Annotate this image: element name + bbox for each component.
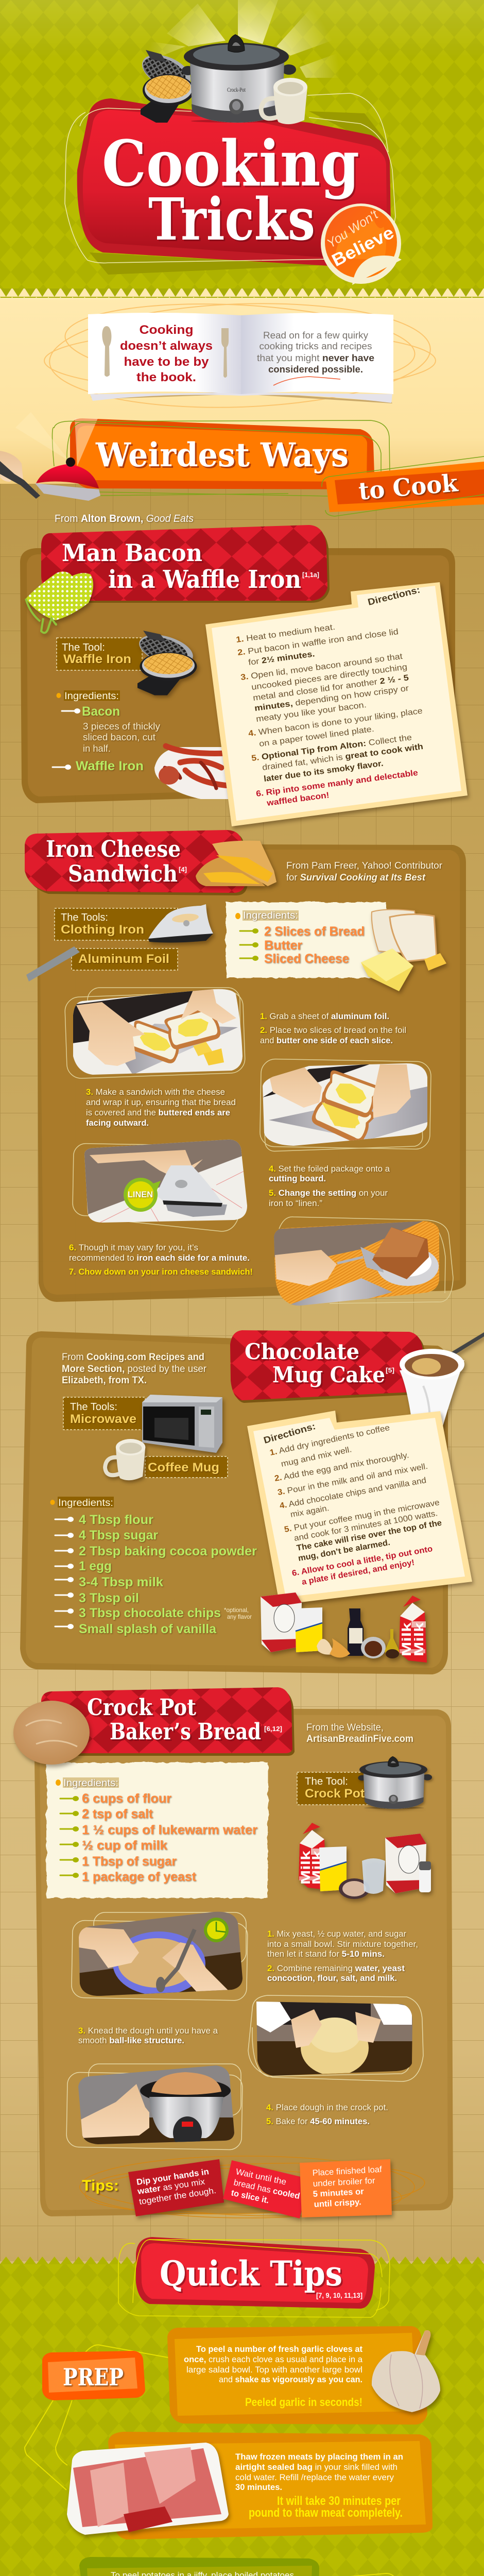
decorative ellipses xyxy=(44,296,436,414)
icon: crock pot xyxy=(358,1756,432,1809)
direction steps: on a paper towel lined plate. xyxy=(258,725,375,749)
title: Cooking Tricks: Cooking xyxy=(102,126,359,200)
tip card 1: together the dough. xyxy=(139,2186,217,2207)
tip card 2 xyxy=(223,2160,309,2218)
tip text: cold water. Refill /replace the water every xyxy=(235,2473,394,2482)
credit: Artisan Bread: From the Website, xyxy=(306,1722,384,1733)
ingredients paper: 1 package of yeast xyxy=(82,1870,197,1884)
tool box: clothing iron: The Tools: xyxy=(61,912,108,923)
tip text: Peeled garlic in seconds! xyxy=(245,2396,362,2409)
title: Cooking Tricks: Tricks xyxy=(148,186,315,253)
background: green diamond quick tips section xyxy=(0,2264,484,2576)
photo step 3: ironing xyxy=(73,1136,250,1231)
icon group: cake ingredients xyxy=(261,1592,427,1663)
ingredients list: 4 Tbsp flour xyxy=(79,1513,153,1527)
sticker: You Won't Believe: You Won't xyxy=(324,207,381,251)
sticker: You Won't Believe: Believe xyxy=(329,223,397,270)
text: step 3: smooth ball-like structure. xyxy=(78,2036,184,2045)
ingredients paper: Ingredients: xyxy=(243,910,298,921)
icon group: bread ingredients xyxy=(299,1823,431,1899)
text: read on: considered possible. xyxy=(268,364,363,375)
ingredients list: 1 egg xyxy=(79,1559,112,1573)
direction steps: The cake will rise over the top of the xyxy=(296,1519,442,1553)
title text: Baker’s Bread xyxy=(110,1719,261,1745)
direction steps: mug, don’t be alarmed. xyxy=(298,1538,391,1563)
icon: garlic xyxy=(372,2330,440,2412)
icon: foil roll xyxy=(26,946,80,981)
icon: spoon xyxy=(102,326,111,377)
icon group: bread ingredients: Milk xyxy=(310,1851,324,1885)
panel: Man Bacon in a Waffle Iron xyxy=(20,525,468,826)
title text: Chocolate xyxy=(245,1339,359,1364)
credit: Cooking.com xyxy=(62,1352,207,1386)
icon: clothing iron xyxy=(148,904,213,943)
background: wooden table grid section xyxy=(0,484,484,2261)
hero: title banner with appliances xyxy=(65,0,402,285)
ingredients list: 3-4 Tbsp milk xyxy=(79,1575,163,1589)
text: step 1 and 2 xyxy=(260,1011,406,1045)
tips: heading and ellipses xyxy=(80,2156,425,2221)
tip text: large salad bowl. Top with another large bowl xyxy=(186,2365,362,2375)
title text: Sandwich xyxy=(68,861,178,887)
icon: bread, butter and cheese xyxy=(361,909,446,991)
ingredients paper: 6 cups of flour xyxy=(82,1791,171,1806)
icon group: bread ingredients: Milk xyxy=(299,1851,313,1885)
panel: Crock Pot Baker's Bread xyxy=(13,1687,453,2221)
text: step 1 and 2: 1. Mix yeast, ½ cup water, and sugar xyxy=(267,1929,406,1939)
photo step 4: finished toast xyxy=(273,1217,453,1309)
direction steps: 2. Put bacon in waffle iron and close lid xyxy=(237,628,399,657)
ingredients paper: 1 Tbsp of sugar xyxy=(82,1854,177,1869)
title: Cooking Tricks xyxy=(102,126,359,253)
title text: in a Waffle Iron xyxy=(108,565,301,594)
tip card 3: Place finished loaf xyxy=(312,2165,382,2178)
direction steps: drained fat, which is great to cook with xyxy=(262,742,424,772)
ingredients list: 2 Tbsp baking cocoa powder xyxy=(79,1544,257,1558)
text: step 1 and 2: then let it stand for 5-10 mins. xyxy=(267,1949,385,1959)
tool box: waffle iron: Waffle Iron xyxy=(63,652,131,666)
tip card 1: Dip your hands in xyxy=(136,2167,210,2187)
tool box: microwave: The Tools: xyxy=(70,1401,117,1413)
direction steps: 2. Add the egg and mix thoroughly. xyxy=(274,1451,410,1483)
direction steps: 3. Open lid, move bacon around so that xyxy=(240,652,403,682)
tip card 3 xyxy=(300,2159,392,2217)
credit: Pam Freer: for Survival Cooking at Its Best xyxy=(286,872,426,883)
text: step 3: is covered and the buttered ends are xyxy=(86,1108,230,1117)
heading: Quick Tips: Quick Tips xyxy=(160,2253,342,2294)
callout: LINEN xyxy=(124,1178,161,1212)
title banner xyxy=(25,830,248,895)
ingredients paper: Ingredients: xyxy=(63,1778,118,1789)
ingredients paper xyxy=(46,1762,268,1898)
heading: Quick Tips xyxy=(118,2237,390,2317)
text: step 4 and 5: 4. Place dough in the crock pot. xyxy=(266,2103,388,2112)
text: step 3: and wrap it up, ensuring that the bread xyxy=(86,1097,236,1107)
tip text xyxy=(184,2345,363,2409)
tip card 1: water as you mix xyxy=(136,2177,206,2196)
direction steps: 6. Rip into some manly and delectable xyxy=(255,769,419,799)
direction steps: mug and mix well. xyxy=(280,1445,353,1469)
tip text: pound to thaw meat completely. xyxy=(249,2506,403,2520)
icon: crock pot xyxy=(182,35,296,123)
icon: fork xyxy=(221,328,229,378)
tip text: once, crush each clove as usual and place in a xyxy=(184,2355,363,2364)
text: cooking doesn't always: have to be by xyxy=(124,355,209,369)
ingredient: bacon xyxy=(62,704,160,754)
title banner xyxy=(41,1687,295,1756)
banner: orange xyxy=(70,418,375,489)
photo step 3: bread in crock pot xyxy=(66,2063,243,2150)
panel: Chocolate Mug Cake xyxy=(20,1330,484,1674)
text: read on: Read on for a few quirky xyxy=(263,330,368,341)
icon: grilled cheese sandwich xyxy=(196,841,276,886)
credit: Cooking.com: More Section, posted by the user xyxy=(62,1364,207,1375)
title text: Iron Cheese xyxy=(46,836,181,862)
photo step 1: mixing bowl xyxy=(72,1909,248,2001)
connectors: COOK xyxy=(320,2573,422,2576)
title text xyxy=(87,1694,261,1745)
text: step 1 and 2 xyxy=(267,1929,418,1983)
tip text: and shake as vigorously as you can. xyxy=(219,2375,362,2384)
ingredients paper: Sliced Cheese xyxy=(264,952,349,966)
direction steps: 5. Optional Tip from Alton: Collect the xyxy=(251,733,412,763)
title text: Crock Pot xyxy=(87,1694,197,1721)
tip text: airtight sealed bag in your sink filled with xyxy=(235,2463,397,2472)
citation: [1,1a] xyxy=(302,571,319,579)
directions note: Directions: xyxy=(263,1421,317,1446)
icon: clock xyxy=(204,1918,229,1942)
tip card 1 xyxy=(128,2159,224,2216)
text: step 3: 3. Make a sandwich with the cheese xyxy=(86,1087,225,1097)
panel: Iron Cheese Sandwich xyxy=(25,830,466,1309)
title banner xyxy=(41,525,330,603)
text: step 6 and 7 xyxy=(69,1243,253,1277)
banner: to Cook: to Cook xyxy=(357,469,460,506)
tips: heading and ellipses: Tips: xyxy=(82,2177,119,2194)
ingredient: waffle iron: Waffle Iron xyxy=(76,759,144,773)
title text: Mug Cake xyxy=(272,1362,385,1387)
directions note: Directions: xyxy=(367,584,421,607)
tip card 3: under broiler for xyxy=(313,2176,376,2189)
directions note xyxy=(247,1411,472,1605)
icon: meat tray xyxy=(67,2443,229,2535)
tool box: coffee mug: Coffee Mug xyxy=(148,1461,219,1475)
background: cream section xyxy=(0,289,484,487)
credit: Pam Freer: From Pam Freer, Yahoo! Contributor xyxy=(286,860,442,871)
tip card 3: 5 minutes or xyxy=(313,2187,365,2199)
icon: waffle iron xyxy=(137,48,196,123)
tool box: aluminum foil xyxy=(72,948,178,970)
direction steps: a plate if desired, and enjoy! xyxy=(301,1558,415,1587)
ingredient: bacon: Bacon xyxy=(82,704,120,719)
text: step 6 and 7: 6. Though it may vary for you, it’s xyxy=(69,1243,198,1252)
outlines xyxy=(53,420,390,496)
text: step 4 and 5 xyxy=(266,2103,388,2126)
text: read on: cooking tricks and recipes xyxy=(260,341,372,351)
ingredients list: Small splash of vanilla xyxy=(79,1622,217,1636)
tool box: clothing iron: Clothing Iron xyxy=(61,923,144,937)
text: step 1 and 2: 2. Combine remaining water, yeast xyxy=(267,1963,405,1973)
sign: PREP: PREP xyxy=(63,2363,124,2391)
text: cooking doesn't always: doesn’t always xyxy=(120,339,213,353)
ingredients paper: 1 ½ cups of lukewarm water xyxy=(82,1823,257,1837)
tip card 3: until crispy. xyxy=(314,2197,361,2209)
direction steps: waffled bacon! xyxy=(266,791,330,808)
text: cooking doesn't always: Cooking xyxy=(139,323,194,337)
photo step 2: kneading dough xyxy=(248,1995,423,2081)
text: step 3 xyxy=(86,1087,236,1128)
citation: [6,12] xyxy=(264,1725,282,1733)
light rays xyxy=(130,0,368,78)
banner: to Cook xyxy=(322,456,484,516)
tip card 2: Wait until the xyxy=(235,2167,287,2187)
direction steps: later due to its smoky flavor. xyxy=(263,759,384,784)
ingredients list: 3 Tbsp chocolate chips xyxy=(79,1606,221,1620)
direction steps: minutes, depending on how crispy or xyxy=(254,684,410,713)
text: step 1 and 2: and butter one side of each slice. xyxy=(260,1036,393,1045)
tool box: waffle iron: The Tool: xyxy=(62,642,105,653)
callout: LINEN: LINEN xyxy=(128,1190,153,1199)
title banner xyxy=(230,1330,425,1403)
ingredients paper xyxy=(226,902,386,978)
direction steps: meaty you like your bacon. xyxy=(255,701,367,724)
tip box: potatoes xyxy=(65,2557,319,2576)
ingredient: bacon: 3 pieces of thickly xyxy=(83,721,160,732)
ingredients paper: 2 tsp of salt xyxy=(82,1807,153,1821)
icon group: cake ingredients: Milk xyxy=(412,1622,426,1656)
text: read on xyxy=(257,330,374,375)
banner shadow shapes xyxy=(90,111,386,275)
tip box: thaw meat xyxy=(67,2432,433,2539)
zigzag edge lower xyxy=(0,2257,484,2264)
background: green diamond top section xyxy=(0,0,484,292)
text: step 6 and 7: recommended to iron each side for a minute. xyxy=(69,1253,250,1263)
icon: mug cake xyxy=(400,1332,484,1428)
text: step 3: 3. Knead the dough until you have a xyxy=(78,2026,218,2036)
direction steps: 1. Add dry ingredients to coffee xyxy=(269,1423,391,1458)
sign: PREP xyxy=(42,2351,145,2400)
text: step 3 xyxy=(78,2026,218,2045)
tip card 2: bread has cooled xyxy=(233,2178,301,2201)
text: step 1 and 2: 1. Grab a sheet of aluminum foil. xyxy=(260,1011,389,1021)
icon: microwave xyxy=(142,1395,222,1453)
direction steps: 1. Heat to medium heat. xyxy=(235,623,336,645)
tool box: microwave: Microwave xyxy=(70,1412,136,1426)
text: step 1 and 2: 2. Place two slices of bread on the foil xyxy=(260,1025,406,1035)
ingredients list: any flavor xyxy=(227,1613,252,1620)
text: step 4 and 5: cutting board. xyxy=(269,1174,326,1183)
title text: Man Bacon xyxy=(62,539,202,567)
text: Weirdest Ways: Weirdest Ways xyxy=(95,436,349,474)
sticker: You Won't Believe xyxy=(321,204,402,285)
text: read on: that you might never have xyxy=(257,353,374,363)
icon: waffle iron xyxy=(133,629,199,695)
citation: [5] xyxy=(386,1366,394,1374)
banner outlines xyxy=(65,93,395,263)
tool box: aluminum foil: Aluminum Foil xyxy=(78,952,169,966)
tool box: microwave xyxy=(63,1397,145,1430)
ingredients label: Ingredients: xyxy=(64,691,119,702)
ingredients paper: ½ cup of milk xyxy=(82,1838,167,1853)
text: step 4 and 5: iron to “linen.” xyxy=(269,1198,322,1208)
connectors: PREP xyxy=(25,2345,168,2490)
tip text xyxy=(235,2452,403,2520)
credit: Cooking.com: Elizabeth, from TX. xyxy=(62,1375,147,1386)
tool box: crock pot: The Tool: xyxy=(305,1776,348,1787)
tool box: crock pot xyxy=(297,1756,432,1809)
direction steps: 4. Add chocolate chips and vanilla and xyxy=(279,1476,427,1511)
tip box: garlic xyxy=(167,2326,440,2425)
photo step 2: assembling sandwich xyxy=(260,1059,431,1151)
ingredients paper: 2 Slices of Bread xyxy=(264,924,365,939)
citation: [7, 9, 10, 11,13] xyxy=(316,2291,362,2299)
directions note xyxy=(205,582,468,826)
title text xyxy=(245,1339,385,1387)
photo step 1: buttering bread xyxy=(64,987,246,1079)
ingredients list: 3 Tbsp oil xyxy=(79,1591,139,1605)
text: step 4 and 5 xyxy=(269,1164,390,1208)
direction steps: uncooked pieces are directly touching xyxy=(251,663,408,692)
tip card 2: to slice it. xyxy=(230,2188,270,2206)
credit: Alton Brown: From Alton Brown, Good Eats xyxy=(55,513,194,524)
direction steps: mix again. xyxy=(290,1504,330,1519)
credit: Cooking.com: From Cooking.com Recipes and xyxy=(62,1352,204,1363)
icon: crock pot: Crock-Pot xyxy=(227,86,246,93)
ingredients list: Ingredients: xyxy=(58,1498,113,1509)
tip text: To peel a number of fresh garlic cloves at xyxy=(196,2345,362,2354)
text: step 3: facing outward. xyxy=(86,1118,149,1128)
text: step 1 and 2: concoction, flour, salt, and milk. xyxy=(267,1973,397,1983)
tool box: crock pot: Crock Pot xyxy=(305,1787,365,1801)
title text xyxy=(62,539,301,594)
text: cooking doesn't always: the book. xyxy=(136,370,196,384)
heading: Weirdest Ways to Cook xyxy=(0,412,484,516)
text: step 4 and 5: 4. Set the foiled package onto a xyxy=(269,1164,390,1174)
text: step 4 and 5: 5. Bake for 45-60 minutes. xyxy=(266,2116,370,2126)
direction steps: 4. When bacon is done to your liking, place xyxy=(248,707,423,738)
icon: coffee mug xyxy=(105,1439,145,1480)
tip text: 30 minutes. xyxy=(235,2483,282,2492)
direction steps: for 2½ minutes. xyxy=(248,650,315,667)
tip text: It will take 30 minutes per xyxy=(277,2494,401,2508)
direction steps xyxy=(269,1423,442,1587)
direction steps: metal and close lid for another 2 ½ - 5 xyxy=(252,673,409,703)
intro: open book xyxy=(44,296,436,414)
direction steps: 3. Pour in the milk and oil and mix well. xyxy=(277,1462,428,1497)
direction steps xyxy=(235,623,424,808)
zigzag edge top xyxy=(0,289,484,298)
title text xyxy=(46,836,181,887)
credit: Artisan Bread xyxy=(306,1722,413,1744)
tool box: clothing iron xyxy=(55,908,178,940)
ingredient: bacon: sliced bacon, cut xyxy=(83,732,155,742)
icon: oven mitt xyxy=(26,572,93,633)
text: step 6 and 7: 7. Chow down on your iron cheese sandwich! xyxy=(69,1267,253,1277)
red banner xyxy=(77,98,391,266)
ingredients paper: Butter xyxy=(264,938,302,953)
text: step 1 and 2: into a small bowl. Stir mixture together, xyxy=(267,1939,418,1949)
credit: Pam Freer xyxy=(286,860,442,883)
text: step 4 and 5: 5. Change the setting on your xyxy=(269,1188,388,1198)
ingredients list xyxy=(50,1497,257,1636)
icon: bacon plate xyxy=(154,746,230,799)
credit: Artisan Bread: ArtisanBreadinFive.com xyxy=(306,1734,413,1744)
icon: hand lifting dome xyxy=(0,412,100,501)
citation: [4] xyxy=(179,866,187,873)
icon: coffee mug xyxy=(261,78,307,124)
ingredient: bacon: in half. xyxy=(83,743,111,754)
tip text: Thaw frozen meats by placing them in an xyxy=(235,2452,403,2462)
tool box: coffee mug xyxy=(145,1456,228,1478)
ingredients list: 4 Tbsp sugar xyxy=(79,1528,158,1543)
direction steps: and cook for 3 minutes at 1000 watts. xyxy=(293,1509,438,1543)
icon group: cake ingredients: Milk xyxy=(400,1622,414,1656)
text: cooking doesn't always xyxy=(120,323,213,384)
ingredients list: *optional, xyxy=(224,1606,249,1614)
outlines xyxy=(118,2240,390,2317)
direction steps: 5. Put your coffee mug in the microwave xyxy=(284,1498,440,1534)
direction steps: 6. Allow to cool a little, tip out onto xyxy=(291,1545,434,1578)
tool box: waffle iron xyxy=(57,638,142,670)
icon: bread loaf xyxy=(13,1701,90,1765)
